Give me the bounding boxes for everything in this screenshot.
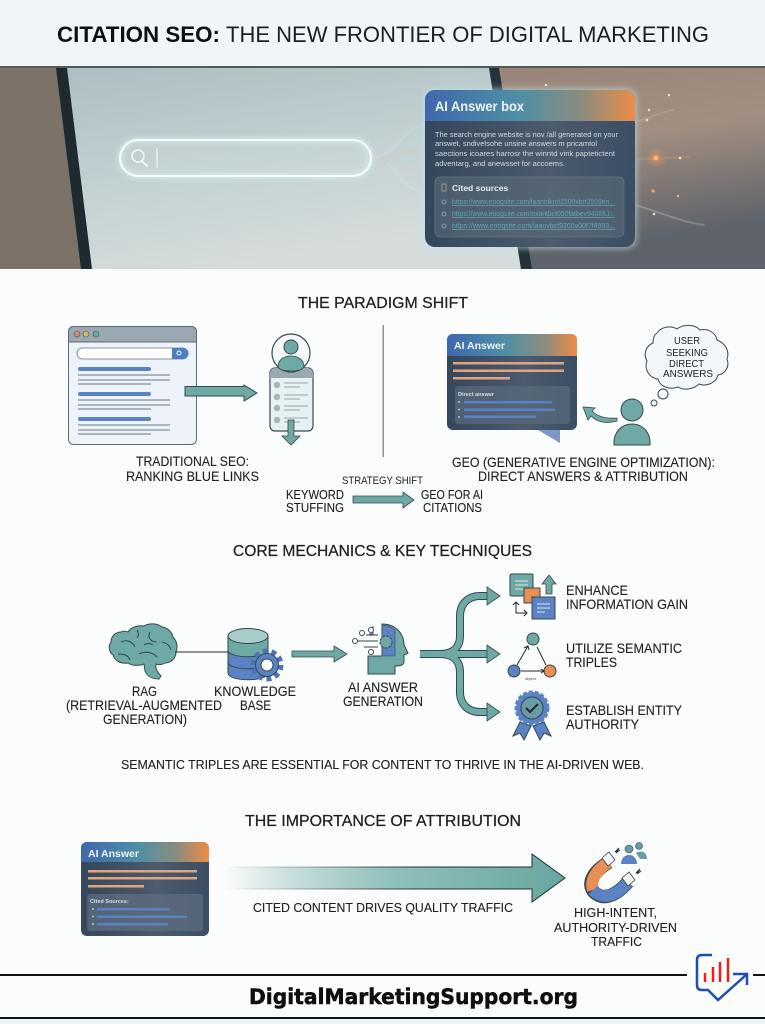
- strategy shift: GEO FOR AI: [421, 487, 483, 502]
- technique labels: UTILIZE SEMANTIC: [566, 640, 682, 656]
- icon: information gain: [510, 574, 556, 619]
- cited sources box: https://www.eoogsite.com/iaanvbct9200v00f7f4933...: [452, 221, 615, 230]
- cloud text: SEEKING: [666, 347, 708, 359]
- icon: knowledge base database: [228, 628, 281, 680]
- icon: footer logo: [697, 955, 747, 1000]
- title: CITATION SEO:: [57, 22, 220, 47]
- gear: [253, 651, 281, 679]
- arrow: strategy shift: [353, 492, 414, 508]
- panel: cited answer card: [81, 842, 209, 936]
- icon: semantic triple: object: [525, 676, 537, 681]
- label: RAG: [66, 683, 222, 727]
- search result lines: [78, 367, 170, 435]
- icon: semantic triple: [508, 633, 556, 681]
- card body text: The search engine website is nov /all generated on your: [435, 130, 618, 139]
- label: GEO: GEO (GENERATIVE ENGINE OPTIMIZATION):: [452, 454, 715, 470]
- icon: brain: [109, 624, 177, 679]
- technique labels: INFORMATION GAIN: [566, 596, 688, 612]
- strategy shift: STRATEGY SHIFT: [342, 475, 423, 487]
- technique labels: ENHANCE: [566, 582, 628, 598]
- card body text: answet, sndivelsohe unsine answers m pricamtol: [435, 139, 597, 148]
- label: cited content: CITED CONTENT DRIVES QUALITY TRAFFIC: [253, 900, 513, 915]
- cited sources box: [435, 177, 624, 237]
- panel: traditional SEO browser: [68, 326, 196, 444]
- cited sources box: https://www.eoogsite.com/oxantbct050fatbev9406fLi...: [452, 209, 615, 218]
- connector line: [175, 651, 229, 653]
- arrow: user to answer: [583, 407, 617, 422]
- cloud text: USER: [674, 335, 700, 347]
- label: knowledge base: [214, 683, 296, 713]
- cited sources box: https://www.eoogsite.com/iaanoikrct2500xbrt2509en...: [452, 197, 615, 206]
- technique labels: AUTHORITY: [566, 716, 640, 732]
- label: high-intent traffic: TRAFFIC: [591, 934, 642, 949]
- label: AI answer generation: GENERATION: [343, 693, 423, 709]
- card title: AI Answer: [88, 848, 139, 860]
- card title: AI Answer: [454, 340, 505, 352]
- label: traditional SEO: TRADITIONAL SEO:: [136, 453, 249, 469]
- label: GEO: [452, 454, 715, 484]
- orange lines: [88, 870, 197, 888]
- label: AI answer generation: AI ANSWER: [348, 679, 418, 695]
- section heading: attribution: THE IMPORTANCE OF ATTRIBUTION: [245, 813, 521, 830]
- strategy shift: [286, 475, 483, 515]
- icon: AI head: [352, 624, 408, 674]
- section heading: paradigm shift: THE PARADIGM SHIFT: [298, 295, 468, 312]
- title: THE NEW FRONTIER OF DIGITAL MARKETING: [226, 22, 709, 47]
- window dots: [74, 331, 99, 337]
- label: RAG: RAG: [132, 683, 157, 699]
- label: RAG: GENERATION): [103, 711, 187, 727]
- strategy shift: CITATIONS: [423, 500, 482, 515]
- technique labels: ESTABLISH ENTITY: [566, 702, 683, 718]
- fork arrows: [420, 587, 500, 721]
- cloud text: DIRECT: [669, 358, 705, 370]
- arrow: to AI generation: [292, 646, 347, 662]
- cited sources box: Cited sources: [452, 183, 508, 193]
- icon: magnet with audience: [591, 842, 647, 897]
- label: traditional SEO: RANKING BLUE LINKS: [126, 468, 259, 484]
- hero backdrop: [0, 68, 765, 269]
- icon: user: [614, 399, 650, 445]
- light streams: [372, 108, 705, 225]
- card body text: adventarg, and anewsset for accoems.: [435, 159, 565, 168]
- panel: AI answer card: [447, 334, 577, 443]
- label: high-intent traffic: HIGH-INTENT,: [574, 905, 657, 920]
- strategy shift: KEYWORD: [286, 487, 344, 502]
- statement: SEMANTIC TRIPLES ARE ESSENTIAL FOR CONTENT TO THRIVE IN THE AI-DRIVEN WEB.: [121, 757, 644, 772]
- glowing search bar: [120, 140, 371, 176]
- orange text lines: [453, 362, 564, 380]
- big arrow: [225, 854, 565, 902]
- hero image panel: [0, 68, 765, 269]
- cloud text: [663, 335, 713, 380]
- card body text: [435, 130, 618, 168]
- thought cloud: [645, 325, 728, 406]
- big arrow outline: [225, 854, 565, 902]
- card body text: saections icoares harrosr the winntd vink paptetictent: [435, 149, 616, 158]
- strategy shift: STUFFING: [286, 500, 344, 515]
- cited sources box: Cited Sources:: [90, 899, 129, 905]
- icon: authority badge: [513, 692, 551, 740]
- label: high-intent traffic: AUTHORITY-DRIVEN: [554, 920, 677, 935]
- arrow: browser to user: [185, 385, 257, 401]
- divider: [382, 325, 384, 457]
- icon: user with result list: [270, 334, 313, 445]
- cloud text: ANSWERS: [663, 368, 713, 380]
- label: AI answer generation: [343, 679, 423, 709]
- technique labels: TRIPLES: [566, 654, 617, 670]
- technique labels: [566, 582, 688, 732]
- direct answer box: Direct answer: [458, 392, 495, 398]
- footer site name: DigitalMarketingSupport.org: [249, 985, 578, 1009]
- label: knowledge base: KNOWLEDGE: [214, 683, 296, 699]
- header band: [0, 0, 765, 68]
- arrow: down: [282, 420, 300, 445]
- label: RAG: (RETRIEVAL-AUGMENTED: [66, 697, 222, 713]
- label: knowledge base: BASE: [240, 697, 271, 713]
- footer strip: [0, 1019, 765, 1024]
- label: GEO: DIRECT ANSWERS & ATTRIBUTION: [478, 468, 688, 484]
- browser search bar: [77, 348, 188, 359]
- label: traditional SEO: [126, 453, 259, 484]
- label: high-intent traffic: [554, 905, 677, 949]
- section heading: core mechanics: CORE MECHANICS & KEY TECHNIQUES: [233, 543, 532, 560]
- card heading: AI Answer box: [435, 99, 524, 114]
- footer rules: [0, 974, 765, 1019]
- sparks: [545, 84, 681, 215]
- AI answer box: [423, 88, 637, 249]
